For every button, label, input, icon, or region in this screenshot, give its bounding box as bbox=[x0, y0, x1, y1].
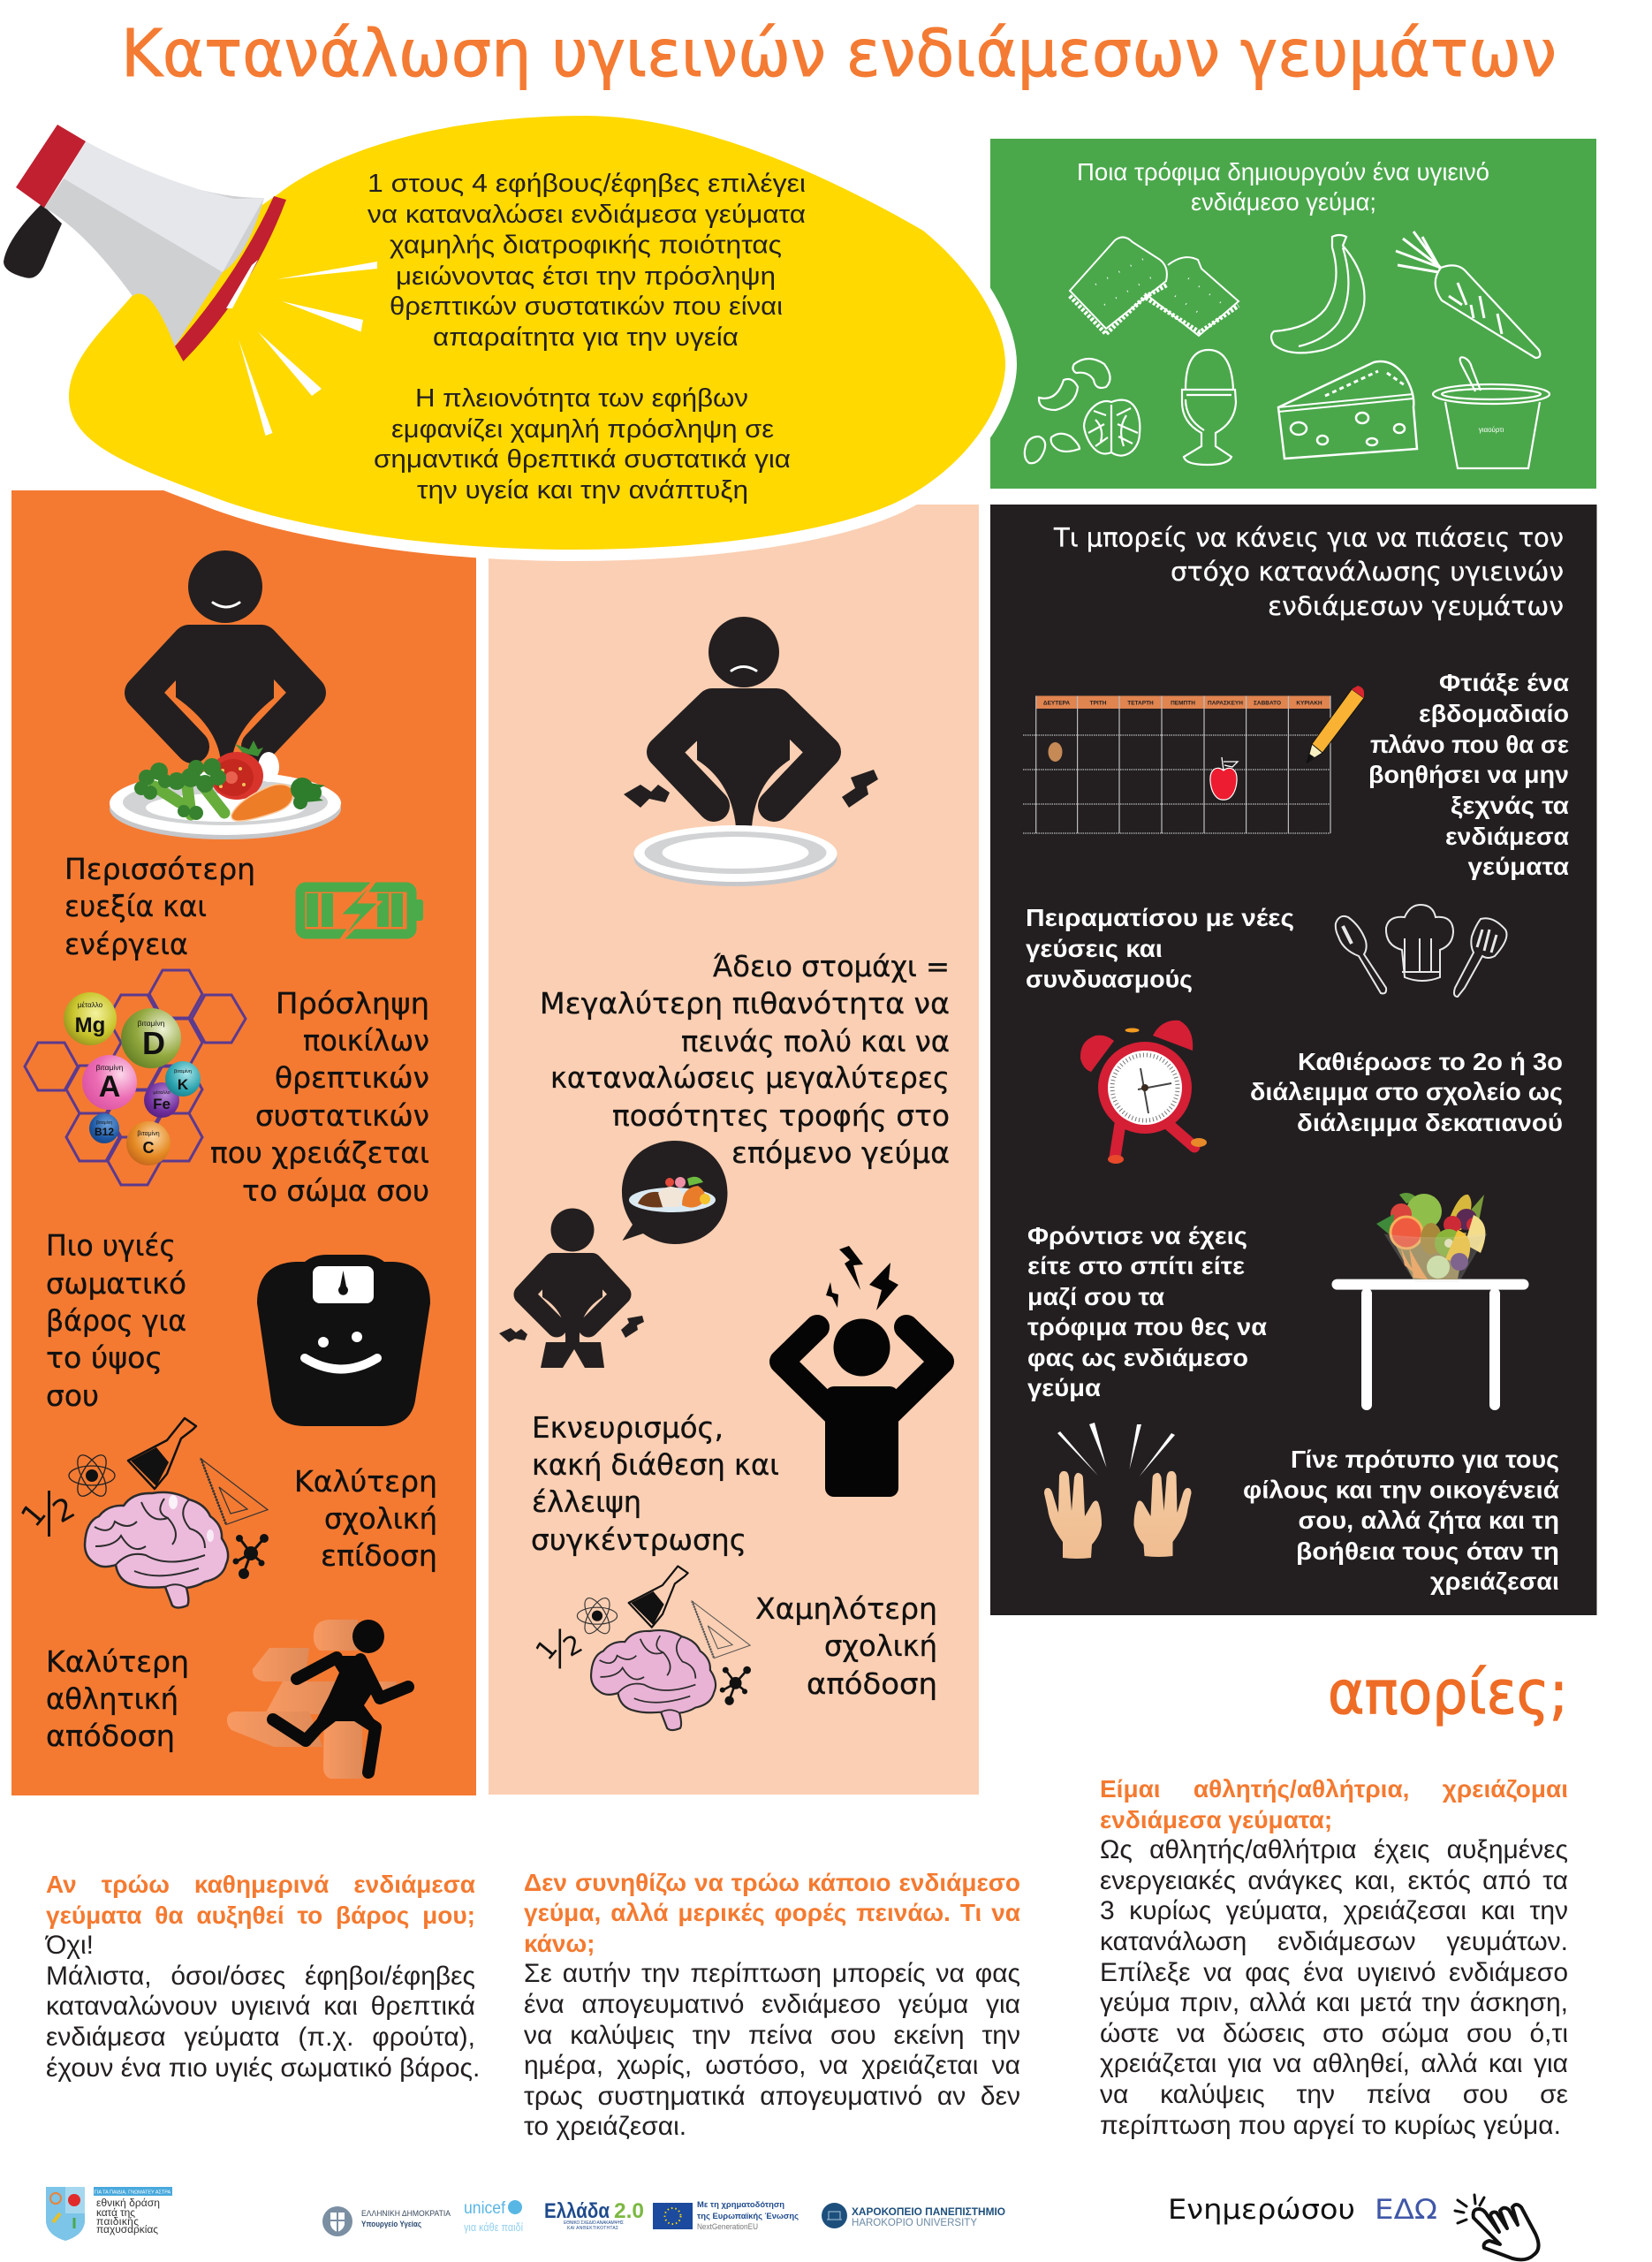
logo: Greece 2.0: ΚΑΙ ΑΝΘΕΚΤΙΚΟΤΗΤΑΣ bbox=[567, 2226, 618, 2231]
text: statistics about teens: Η πλειονότητα των εφήβων bbox=[415, 384, 748, 413]
icon: brain with science symbols: 1 bbox=[14, 1497, 54, 1534]
chart: weekly snack plan calendar: ΠΕΜΠΤΗ bbox=[1171, 700, 1195, 707]
heading: what you can do: Τι μπορείς να κάνεις για να πιάσεις τον bbox=[1053, 523, 1564, 553]
panel: healthy snack foods (green) bbox=[990, 139, 1596, 489]
icon: vitamins and minerals on hexagons: Fe bbox=[153, 1096, 171, 1112]
text: better school performance: σχολική bbox=[324, 1501, 437, 1536]
text block: athlete question: Είμαι αθλητής/αθλήτρια, χρειάζομαι bbox=[1100, 1775, 1568, 1803]
chart: weekly snack plan calendar: ΤΡΙΤΗ bbox=[1090, 700, 1107, 707]
logo: unicef: unicef bbox=[464, 2199, 506, 2218]
text: lower school performance: Χαμηλότερη bbox=[755, 1591, 937, 1626]
text: irritability, bad mood, lack of concentration: έλλειψη bbox=[532, 1484, 641, 1519]
text block: not used to snacks question: ένα απογευματινό ενδιάμεσο γεύμα για bbox=[524, 1990, 1020, 2019]
text: keep foods at hand tip: τρόφιμα που θες να bbox=[1027, 1313, 1267, 1340]
text: irritability, bad mood, lack of concentration: Εκνευρισμός, bbox=[532, 1410, 724, 1445]
logo: Greece 2.0 bbox=[544, 2199, 644, 2231]
icon: speech bubble with a meal bbox=[622, 1141, 728, 1244]
text: irritability, bad mood, lack of concentration: κακή διάθεση και bbox=[532, 1447, 779, 1482]
heading: what you can do bbox=[1053, 523, 1564, 621]
panel: consequences of skipping snacks (peach) bbox=[489, 505, 979, 1795]
text: statistics about teens bbox=[368, 170, 806, 505]
text: statistics about teens: θρεπτικών συστατικών που είναι bbox=[390, 292, 783, 321]
text block: athlete question: χρειάζεται για να αθληθεί, αλλά και για bbox=[1100, 2049, 1568, 2078]
logo: EU funding: Με τη χρηματοδότηση bbox=[697, 2200, 784, 2210]
text: intake of various nutrients: θρεπτικών bbox=[275, 1060, 429, 1095]
text: keep foods at hand tip: είτε στο σπίτι είτε bbox=[1027, 1252, 1245, 1279]
logos: footer partner logos bbox=[46, 2187, 1005, 2241]
text: statistics about teens: να καταναλώσει ενδιάμεσα γεύματα bbox=[368, 201, 806, 229]
text block: weight gain question: καταναλώνουν υγιεινά και θρεπτικά bbox=[46, 1992, 475, 2021]
text: keep foods at hand tip: Φρόντισε να έχεις bbox=[1027, 1222, 1247, 1249]
text: weekly plan tip: εβδομαδιαίο bbox=[1419, 700, 1569, 727]
icon: kitchen tools and chef hat bbox=[1336, 905, 1507, 997]
chart: weekly snack plan calendar: ΔΕΥΤΕΡΑ bbox=[1043, 700, 1070, 707]
text block: weight gain question: Αν τρώω καθημερινά ενδιάμεσα bbox=[46, 1871, 475, 1898]
icon: vitamins and minerals on hexagons bbox=[25, 970, 246, 1185]
heading: which foods make a healthy snack: Ποια τρόφιμα δημιουργούν ένα υγιεινό bbox=[1077, 158, 1489, 186]
text: empty stomach effects bbox=[540, 949, 950, 1170]
text: lower school performance bbox=[755, 1591, 937, 1701]
icon: smiling bathroom scale bbox=[257, 1255, 430, 1426]
text: better athletic performance: απόδοση bbox=[46, 1719, 175, 1753]
icon: vitamins and minerals on hexagons: C bbox=[143, 1139, 154, 1157]
logo: Greece 2.0: ΕΘΝΙΚΟ ΣΧΕΔΙΟ ΑΝΑΚΑΜΨΗΣ bbox=[564, 2220, 624, 2226]
text: statistics about teens: 1 στους 4 εφήβους/έφηβες επιλέγει bbox=[368, 170, 806, 198]
text block: weight gain question: Μάλιστα, όσοι/όσες έφηβοι/έφηβες bbox=[46, 1962, 475, 1991]
chart: weekly snack plan calendar: ΠΑΡΑΣΚΕΥΗ bbox=[1208, 700, 1243, 707]
text: more health and energy: Περισσότερη bbox=[64, 852, 255, 886]
text: healthier body weight: το ύψος bbox=[46, 1340, 163, 1375]
icon: charging battery bbox=[300, 876, 423, 945]
icon: vitamins and minerals on hexagons: K bbox=[178, 1076, 189, 1093]
heading: which foods make a healthy snack: ενδιάμεσο γεύμα; bbox=[1191, 188, 1376, 216]
text: keep foods at hand tip: γεύμα bbox=[1027, 1374, 1101, 1401]
text: try new flavours tip: συνδυασμούς bbox=[1026, 965, 1193, 993]
icon: vitamins and minerals on hexagons: βιταμίνη bbox=[138, 1019, 165, 1028]
text: more health and energy: ενέργεια bbox=[64, 927, 188, 961]
text: better athletic performance bbox=[46, 1644, 189, 1753]
logo: unicef: για κάθε παιδί bbox=[464, 2220, 523, 2234]
logo: ministry of health: Υπουργείο Υγείας bbox=[361, 2220, 421, 2229]
text block: athlete question: κατανάλωση ενδιάμεσων γευμάτων. bbox=[1100, 1927, 1568, 1956]
icon: banana bbox=[1271, 235, 1364, 353]
text block: not used to snacks question: Δεν συνηθίζω να τρώω κάποιο ενδιάμεσο bbox=[524, 1869, 1020, 1896]
text: try new flavours tip bbox=[1026, 904, 1294, 993]
logo: unicef bbox=[464, 2199, 523, 2234]
icon: toast slices bbox=[1070, 237, 1239, 336]
text: better athletic performance: Καλύτερη bbox=[46, 1644, 189, 1679]
logo: ministry of health bbox=[322, 2206, 451, 2236]
logo: Greece 2.0: 2.0 bbox=[614, 2199, 644, 2223]
icon: happy person silhouette bbox=[141, 550, 309, 762]
text: irritability, bad mood, lack of concentration: συγκέντρωσης bbox=[531, 1522, 746, 1557]
text: empty stomach effects: επόμενο γεύμα bbox=[731, 1135, 950, 1170]
text: healthier body weight: σωματικό bbox=[46, 1266, 186, 1301]
text: better school performance bbox=[294, 1464, 437, 1573]
text block: weight gain question: γεύματα θα αυξηθεί το βάρος μου; bbox=[46, 1901, 475, 1929]
icon: brain with science symbols (lower performance) bbox=[530, 1566, 751, 1730]
chart: weekly snack plan calendar: ΤΕΤΑΡΤΗ bbox=[1127, 700, 1154, 707]
text: keep foods at hand tip bbox=[1027, 1222, 1267, 1401]
text: mid-morning break tip bbox=[1250, 1048, 1563, 1136]
text block: athlete question: ώστε να δώσεις στο σώμα σου ό,τι bbox=[1100, 2019, 1568, 2048]
icon: vitamins and minerals on hexagons: βιταμίνη bbox=[96, 1120, 112, 1126]
text: mid-morning break tip: διάλειμμα στο σχολείο ως bbox=[1250, 1078, 1563, 1105]
heading: what you can do: στόχο κατανάλωσης υγιεινών bbox=[1171, 557, 1564, 587]
logo: Harokopio University: ΧΑΡΟΚΟΠΕΙΟ ΠΑΝΕΠΙΣΤΗΜΙΟ bbox=[852, 2205, 1005, 2218]
text block: not used to snacks question: ημέρα, χωρίς, ωστόσο, να χρειάζεται να bbox=[524, 2051, 1020, 2080]
link text: get informed here: Ενημερώσου bbox=[1168, 2194, 1355, 2226]
text: healthier body weight: βάρος για bbox=[46, 1303, 186, 1338]
text: healthier body weight: Πιο υγιές bbox=[46, 1228, 176, 1263]
icon: small hungry person bbox=[499, 1209, 644, 1368]
icon: yogurt pot bbox=[1433, 357, 1550, 468]
icon: vitamins and minerals on hexagons: A bbox=[99, 1070, 120, 1104]
link text: get informed here bbox=[1168, 2194, 1437, 2226]
text: statistics about teens: εμφανίζει χαμηλή πρόσληψη σε bbox=[391, 415, 774, 444]
icon: running person bbox=[227, 1620, 408, 1779]
logo: national action against childhood obesity: ΓΙΑ ΤΑ ΠΑΙΔΙΑ, ΓΝΩΜΑΤΕΥ ΑΣΤΡΑ bbox=[95, 2190, 171, 2195]
text block: athlete question: ενδιάμεσα γεύματα; bbox=[1100, 1806, 1332, 1833]
icon: red alarm clock bbox=[1080, 1021, 1207, 1164]
text block: not used to snacks question: τρως συστηματικά απογευματινό αν δεν bbox=[524, 2082, 1020, 2111]
logo: national action against childhood obesity: παχυσαρκίας bbox=[96, 2223, 158, 2235]
icon: plate with vegetables bbox=[110, 740, 341, 839]
text: statistics about teens: χαμηλής διατροφικής ποιότητας bbox=[390, 232, 782, 260]
text block: weight gain question: Όχι! bbox=[46, 1931, 94, 1960]
icon: clicking hand cursor bbox=[1455, 2195, 1539, 2259]
text: intake of various nutrients: το σώμα σου bbox=[242, 1173, 429, 1208]
icon: carrot bbox=[1396, 232, 1540, 358]
icon: vitamins and minerals on hexagons: μέταλλο bbox=[153, 1089, 171, 1096]
text: keep foods at hand tip: μαζί σου τα bbox=[1027, 1283, 1164, 1310]
text: be a role model tip: σου, αλλά ζήτα και τη bbox=[1299, 1507, 1559, 1534]
icon: vitamins and minerals on hexagons: βιταμίνη bbox=[174, 1069, 192, 1074]
panel: benefits of snacks (orange) bbox=[11, 490, 476, 1795]
icon: stressed person with lightning bbox=[782, 1246, 942, 1497]
logo: EU funding: της Ευρωπαϊκής Ένωσης bbox=[697, 2212, 799, 2221]
chart: weekly snack plan calendar: ΚΥΡΙΑΚΗ bbox=[1296, 700, 1322, 707]
icon: empty plate bbox=[634, 825, 837, 886]
text: healthier body weight bbox=[46, 1228, 186, 1413]
text: lower school performance: σχολική bbox=[824, 1628, 937, 1663]
icon: brain with science symbols: 2 bbox=[47, 1491, 81, 1530]
icon: sad person silhouette bbox=[624, 617, 878, 827]
icon: wedge of cheese bbox=[1278, 361, 1417, 459]
text: lower school performance: απόδοση bbox=[807, 1666, 937, 1701]
text: weekly plan tip: γεύματα bbox=[1468, 853, 1569, 880]
text: empty stomach effects: καταναλώσεις μεγαλύτερες bbox=[550, 1060, 950, 1095]
heading: which foods make a healthy snack bbox=[1077, 158, 1489, 216]
text: healthier body weight: σου bbox=[46, 1378, 99, 1413]
text block: not used to snacks question: να καλύψεις την πείνα σου εκείνη την bbox=[524, 2021, 1020, 2050]
text: more health and energy: ευεξία και bbox=[64, 889, 207, 923]
text: be a role model tip: βοήθεια τους όταν τη bbox=[1296, 1537, 1559, 1565]
text: weekly plan tip: πλάνο που θα σε bbox=[1370, 731, 1569, 758]
text: weekly plan tip: ξεχνάς τα bbox=[1451, 792, 1569, 819]
icon: vitamins and minerals on hexagons: Mg bbox=[75, 1013, 105, 1037]
text: statistics about teens: σημαντικά θρεπτικά συστατικά για bbox=[374, 445, 791, 474]
text: try new flavours tip: Πειραματίσου με νέες bbox=[1026, 904, 1294, 931]
icon: raised hands with rays bbox=[1044, 1423, 1191, 1559]
icon: nuts bbox=[1025, 359, 1140, 463]
text: empty stomach effects: Μεγαλύτερη πιθανότητα να bbox=[540, 986, 950, 1021]
icon: table with fruit bowl bbox=[1332, 1193, 1528, 1410]
text block: athlete question: γεύμα πριν, αλλά και μετά την άσκηση, bbox=[1100, 1988, 1568, 2017]
text: mid-morning break tip: διάλειμμα δεκατιανού bbox=[1297, 1109, 1563, 1136]
text: weekly plan tip bbox=[1368, 669, 1569, 880]
icon: vitamins and minerals on hexagons: B12 bbox=[95, 1126, 114, 1138]
icon: pencil bbox=[1307, 686, 1364, 763]
text: better school performance: Καλύτερη bbox=[294, 1464, 437, 1499]
text block: athlete question: 3 κυρίως γεύματα, χρειάζεσαι και την bbox=[1100, 1896, 1568, 1925]
text: empty stomach effects: Άδειο στομάχι = bbox=[713, 949, 950, 983]
text: keep foods at hand tip: φας ως ενδιάμεσο bbox=[1027, 1344, 1248, 1371]
text: more health and energy bbox=[64, 852, 255, 961]
logo: Harokopio University: HAROKOPIO UNIVERSITY bbox=[852, 2216, 977, 2228]
text block: athlete question: Επίλεξε να φας ένα υγιεινό ενδιάμεσο bbox=[1100, 1958, 1568, 1987]
text: be a role model tip bbox=[1243, 1446, 1559, 1595]
icon: vitamins and minerals on hexagons: βιταμίνη bbox=[96, 1063, 124, 1072]
text block: athlete question: ενεργειακές ανάγκες και, εκτός από τα bbox=[1100, 1866, 1568, 1895]
text: weekly plan tip: ενδιάμεσα bbox=[1445, 823, 1569, 850]
text block: not used to snacks question: Σε αυτήν την περίπτωση μπορείς να φας bbox=[524, 1959, 1020, 1988]
chart: weekly snack plan calendar bbox=[1023, 696, 1330, 833]
text: better school performance: επίδοση bbox=[321, 1538, 437, 1573]
icon: brain with science symbols (lower performance): 1 bbox=[530, 1634, 564, 1666]
text: intake of various nutrients: που χρειάζεται bbox=[210, 1135, 429, 1170]
logo: national action against childhood obesity: παιδικής bbox=[96, 2215, 139, 2228]
logo: national action against childhood obesity: εθνική δράση bbox=[96, 2197, 160, 2209]
text block: not used to snacks question bbox=[524, 1869, 1020, 2141]
logo: national action against childhood obesity bbox=[46, 2187, 172, 2241]
text block: athlete question: περίπτωση που αργεί το κυρίως γεύμα. bbox=[1100, 2111, 1561, 2140]
panel: how to reach the goal (black) bbox=[990, 505, 1597, 1615]
text block: not used to snacks question: το χρειάζεσαι. bbox=[524, 2112, 686, 2141]
text: weekly plan tip: Φτιάξε ένα bbox=[1439, 669, 1569, 696]
icon: yogurt pot: γιαούρτι bbox=[1479, 426, 1504, 434]
link text: get informed here: ΕΔΩ bbox=[1375, 2194, 1437, 2226]
heading: what you can do: ενδιάμεσων γευμάτων bbox=[1268, 591, 1564, 621]
icon: brain with science symbols (lower performance): 2 bbox=[558, 1628, 587, 1663]
text: better athletic performance: αθλητική bbox=[46, 1681, 178, 1716]
icon: megaphone bbox=[4, 125, 377, 436]
text: be a role model tip: φίλους και την οικογένειά bbox=[1243, 1476, 1559, 1504]
icon: vitamins and minerals on hexagons: βιταμίνη bbox=[137, 1130, 160, 1137]
callout: yellow speech bubble with statistics bbox=[69, 116, 1005, 550]
text block: not used to snacks question: γεύμα, αλλά μερικές φορές πεινάω. Τι να bbox=[524, 1899, 1020, 1926]
text block: weight gain question: ενδιάμεσα γεύματα (π.χ. φρούτα), bbox=[46, 2023, 475, 2052]
text: statistics about teens: μειώνοντας έτσι την πρόσληψη bbox=[396, 262, 776, 291]
icon: brain with science symbols bbox=[14, 1418, 269, 1608]
text block: athlete question bbox=[1100, 1775, 1568, 2140]
text: empty stomach effects: ποσότητες τροφής στο bbox=[612, 1098, 950, 1133]
icon: vitamins and minerals on hexagons: μέταλλο bbox=[78, 1001, 103, 1009]
logo: Harokopio University bbox=[822, 2203, 1005, 2228]
icon: egg in a cup bbox=[1182, 350, 1236, 465]
text: irritability, bad mood, lack of concentration bbox=[531, 1410, 779, 1557]
title: Κατανάλωση υγιεινών ενδιάμεσων γευμάτων bbox=[121, 16, 1557, 92]
logo: ministry of health: ΕΛΛΗΝΙΚΗ ΔΗΜΟΚΡΑΤΙΑ bbox=[361, 2209, 451, 2219]
text: intake of various nutrients bbox=[210, 986, 429, 1208]
heading: questions: απορίες; bbox=[1328, 1659, 1568, 1728]
logo: EU funding: NextGenerationEU bbox=[697, 2222, 758, 2232]
chart: weekly snack plan calendar: ΣΑΒΒΑΤΟ bbox=[1254, 700, 1281, 707]
text block: athlete question: Ως αθλητής/αθλήτρια έχεις αυξημένες bbox=[1100, 1835, 1568, 1864]
logo: Greece 2.0: Ελλάδα bbox=[544, 2199, 610, 2223]
text: be a role model tip: Γίνε πρότυπο για τους bbox=[1291, 1446, 1559, 1473]
text: mid-morning break tip: Καθιέρωσε το 2ο ή 3ο bbox=[1298, 1048, 1563, 1075]
text: statistics about teens: απαραίτητα για την υγεία bbox=[433, 323, 739, 352]
text block: weight gain question bbox=[45, 1871, 480, 2083]
text: empty stomach effects: πεινάς πολύ και να bbox=[681, 1024, 950, 1059]
text: intake of various nutrients: συστατικών bbox=[255, 1098, 429, 1133]
text: try new flavours tip: γεύσεις και bbox=[1026, 935, 1163, 962]
icon: vitamins and minerals on hexagons: D bbox=[142, 1025, 165, 1061]
text: intake of various nutrients: Πρόσληψη bbox=[276, 986, 429, 1021]
text block: weight gain question: έχουν ένα πιο υγιές σωματικό βάρος. bbox=[46, 2053, 480, 2083]
text block: athlete question: να καλύψεις την πείνα σου σε bbox=[1100, 2080, 1568, 2109]
text: be a role model tip: χρειάζεσαι bbox=[1430, 1567, 1559, 1595]
text: intake of various nutrients: ποικίλων bbox=[303, 1023, 429, 1058]
text: statistics about teens: την υγεία και την ανάπτυξη bbox=[417, 476, 748, 505]
text: weekly plan tip: βοηθήσει να μην bbox=[1368, 761, 1569, 788]
logo: national action against childhood obesity: κατά της bbox=[96, 2206, 135, 2219]
text block: not used to snacks question: κάνω; bbox=[524, 1930, 595, 1957]
logo: EU funding bbox=[653, 2200, 799, 2232]
